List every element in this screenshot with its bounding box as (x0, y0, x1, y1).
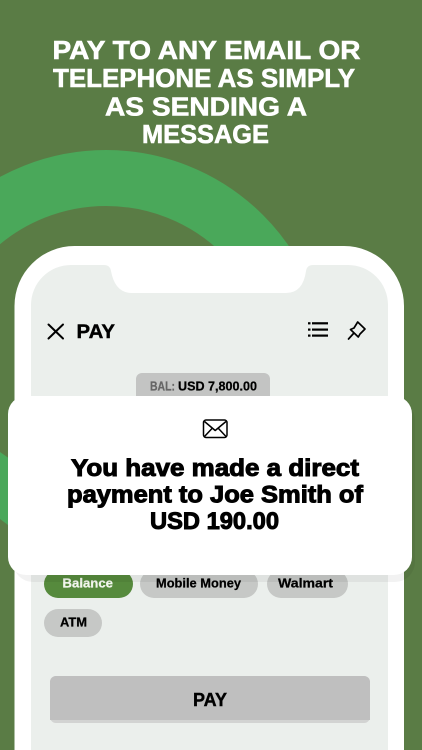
title: PAY TO ANY EMAIL OR (52, 35, 361, 65)
chip: Balance: Balance (62, 576, 113, 590)
chip: ATM: ATM (60, 614, 87, 630)
dialog shadow (13, 400, 415, 582)
balance pill: USD 7,800.00 (178, 378, 257, 394)
icon: pin (348, 322, 365, 339)
decorative ring: lower left fragment (0, 452, 20, 534)
icon: list (308, 322, 328, 337)
icon: close (48, 324, 63, 338)
dialog message: payment to Joe Smith of (67, 482, 364, 508)
chip: Mobile Money (140, 570, 258, 598)
confirmation dialog (8, 396, 415, 582)
phone screen (31, 265, 388, 750)
dialog message (67, 455, 364, 535)
pay button: PAY (193, 690, 227, 710)
dialog card (8, 396, 412, 575)
phone frame (14, 246, 404, 750)
icon: envelope (204, 420, 227, 438)
pay button (50, 676, 370, 723)
dialog message: USD 190.00 (150, 508, 279, 535)
title (52, 35, 361, 149)
chip: Walmart (267, 570, 348, 598)
title: MESSAGE (142, 119, 269, 149)
dialog message: You have made a direct (71, 455, 359, 482)
chip: Balance (44, 570, 133, 598)
chip: ATM (44, 609, 102, 637)
title: AS SENDING A (105, 92, 307, 122)
payment method chips (44, 570, 348, 637)
header label: PAY: PAY (76, 321, 115, 343)
balance pill: BAL: (150, 378, 175, 394)
balance pill (136, 373, 270, 396)
chip: Mobile Money: Mobile Money (156, 576, 242, 590)
decorative ring: green arc (0, 150, 289, 246)
chip: Walmart: Walmart (278, 576, 334, 590)
title: TELEPHONE AS SIMPLY (53, 63, 355, 93)
